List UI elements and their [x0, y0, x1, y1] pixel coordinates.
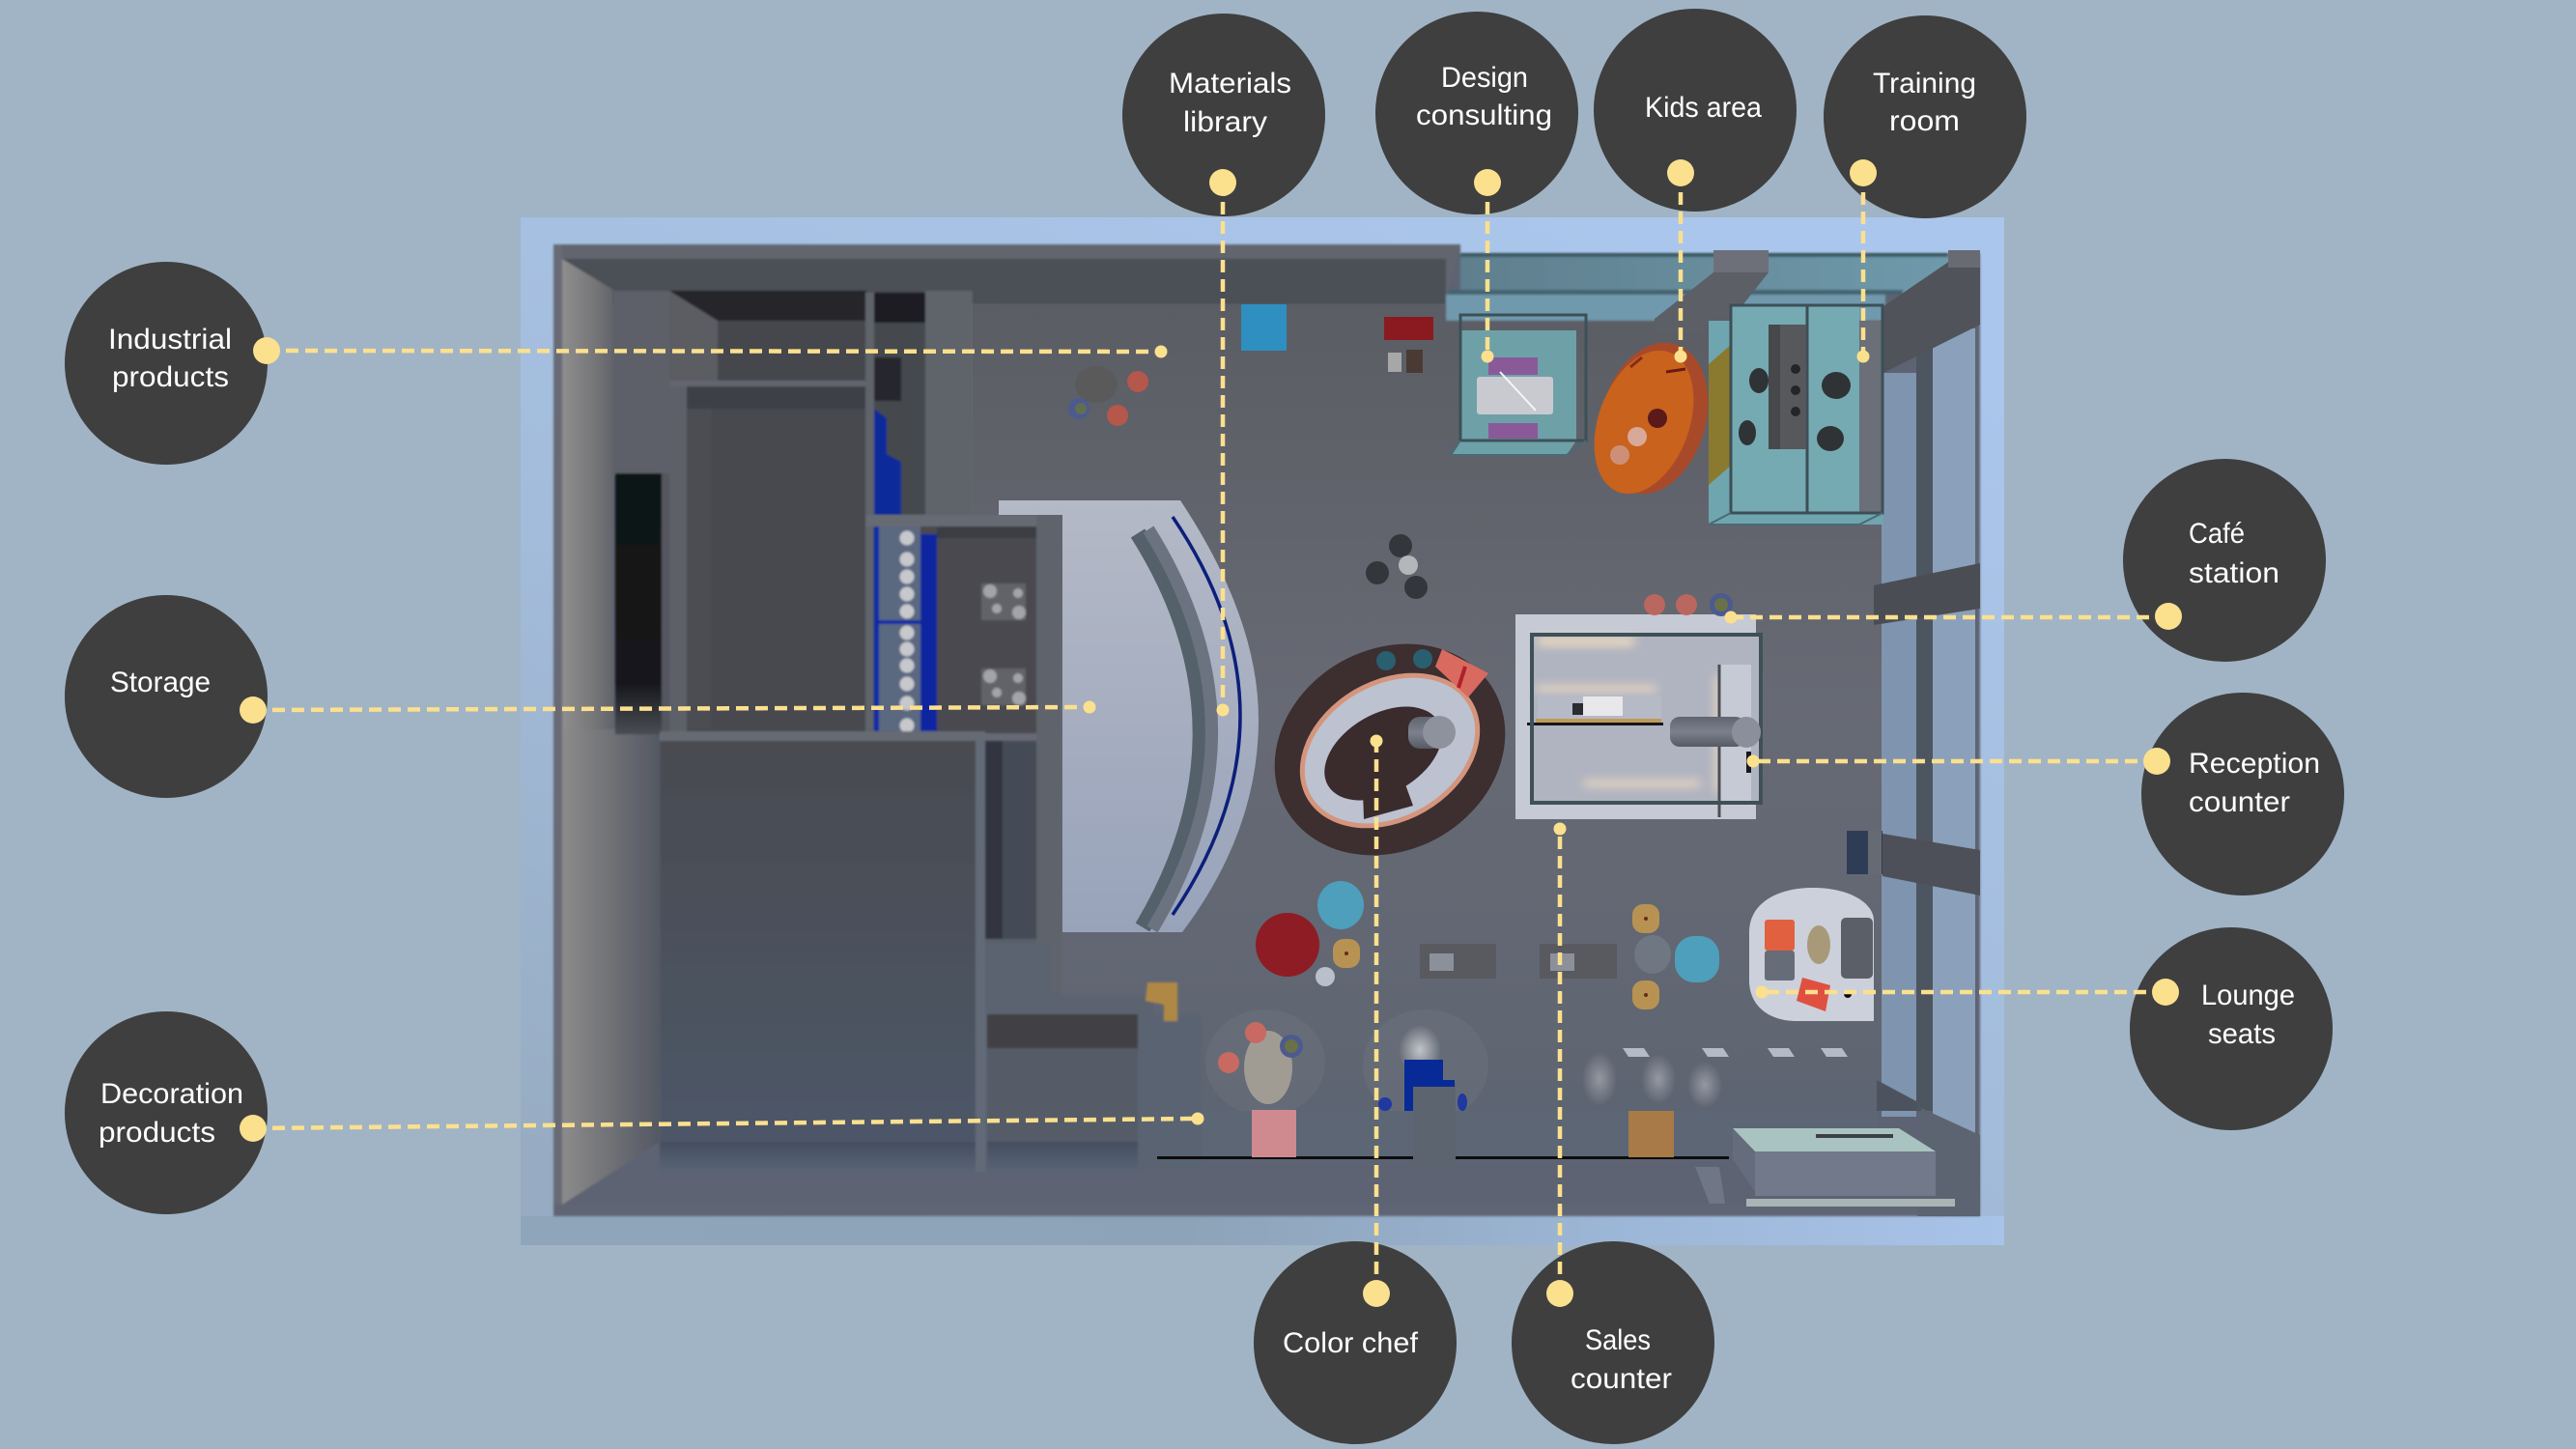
blue wall panel	[1241, 304, 1287, 351]
blue shelf with white discs	[874, 526, 937, 733]
dark slot	[615, 473, 662, 734]
callout: Color chef	[1254, 734, 1457, 1444]
glass facade top	[1446, 253, 1953, 321]
callout: Kids area	[1594, 9, 1797, 363]
reception and cafe block	[1515, 614, 1761, 819]
reception cylinder	[1670, 717, 1761, 748]
callout: Decoration products: products	[99, 1117, 215, 1149]
glow strips	[1536, 638, 1721, 792]
callout: Materials library: Materials	[1169, 68, 1291, 99]
callout: Kids area: Kids area	[1645, 92, 1762, 124]
teal stools	[1376, 649, 1432, 670]
sofa cushion	[1765, 920, 1795, 980]
shelves with blue panels	[874, 293, 925, 515]
callout: Sales counter	[1512, 823, 1714, 1444]
floor light pools	[1205, 1009, 1722, 1122]
stools and ottomans right	[1632, 904, 1719, 1009]
big storage room	[660, 731, 985, 1172]
callout: Storage	[65, 595, 1095, 798]
training chairs	[1739, 368, 1851, 451]
left wall	[562, 259, 613, 734]
training table	[1769, 325, 1806, 449]
alcove	[973, 305, 1002, 518]
callout: Decoration products: Decoration	[100, 1078, 243, 1110]
coffee machine	[1572, 696, 1623, 716]
callout: Lounge seats: seats	[2208, 1018, 2276, 1050]
callout: Industrial products: Industrial	[108, 324, 232, 355]
product stools	[981, 583, 1026, 705]
callout: Design consulting: Design	[1441, 62, 1528, 94]
corner column	[1883, 250, 1980, 373]
back room with product stand	[660, 515, 1202, 1172]
navy line	[1173, 517, 1240, 915]
callout: Cafe station: station	[2189, 557, 2279, 589]
callout: Color chef: Color chef	[1283, 1327, 1419, 1359]
logo plinth	[1695, 1128, 1955, 1207]
callout: Lounge seats	[1756, 927, 2333, 1130]
building shell	[553, 244, 1980, 1216]
callout: Industrial products: products	[112, 361, 229, 393]
callout: Cafe station: Café	[2189, 518, 2245, 550]
callout: Storage: Storage	[110, 667, 211, 698]
round table with chairs top	[1068, 366, 1148, 426]
back of house rooms	[613, 291, 1002, 734]
cafe stools	[1366, 534, 1428, 599]
curved stage	[999, 500, 1259, 932]
frame	[1532, 635, 1761, 803]
stone table and chairs bottom	[1218, 1022, 1303, 1104]
lounge seats cluster left	[1256, 881, 1364, 986]
callout: Training room: room	[1889, 105, 1960, 137]
pillar wall	[925, 291, 973, 515]
outer light-blue ground	[521, 217, 2004, 1245]
callout: Sales counter: Sales	[1585, 1324, 1651, 1356]
callout: Materials library	[1122, 14, 1325, 717]
lounge carpet	[1749, 888, 1874, 1021]
room C	[987, 1014, 1138, 1172]
room A	[669, 291, 866, 381]
retail floor	[973, 304, 1882, 1111]
design consulting glass room	[1451, 315, 1586, 455]
right wall fins	[1847, 563, 1980, 1216]
bar shelf	[1527, 719, 1663, 725]
room B	[669, 381, 866, 733]
side panel	[1719, 665, 1751, 817]
kids area orange table	[1575, 329, 1725, 507]
callout: Reception counter: counter	[2189, 786, 2290, 818]
callout: Cafe station	[1725, 459, 2326, 662]
cafe chairs	[1644, 593, 1733, 616]
cylinder	[1408, 716, 1456, 749]
callout: Design consulting	[1375, 12, 1578, 363]
callout: Sales counter: counter	[1571, 1363, 1672, 1395]
callout: Materials library: library	[1183, 106, 1267, 138]
callout: Design consulting: consulting	[1416, 99, 1552, 131]
blue display stand	[1378, 1060, 1467, 1169]
callout: Lounge seats: Lounge	[2201, 980, 2295, 1011]
right window glazing	[1882, 328, 1975, 1135]
callout: Decoration products	[65, 1011, 1203, 1214]
swatch fan	[1435, 649, 1488, 697]
top wall	[553, 244, 1460, 304]
corridor slot	[985, 741, 1036, 944]
display tables	[1420, 944, 1617, 979]
wall mini displays	[1623, 1048, 1848, 1057]
callout: Training room: Training	[1873, 68, 1976, 99]
training room glass	[1709, 305, 1883, 525]
callout: Training room	[1824, 15, 2026, 363]
callout: Industrial products	[65, 262, 1167, 465]
callout: Reception counter: Reception	[2189, 748, 2320, 780]
color chef ring	[1236, 603, 1543, 896]
callout: Reception counter	[1746, 693, 2344, 895]
floor plan panel	[521, 217, 2004, 1245]
materials library shelf	[1138, 533, 1201, 927]
shelf block	[613, 291, 669, 474]
wooden shelf	[1146, 982, 1177, 1021]
structural beam	[1655, 250, 1769, 332]
wall	[865, 293, 874, 733]
top-left shelf unit red	[1384, 317, 1433, 373]
front wall	[1157, 1110, 1878, 1159]
